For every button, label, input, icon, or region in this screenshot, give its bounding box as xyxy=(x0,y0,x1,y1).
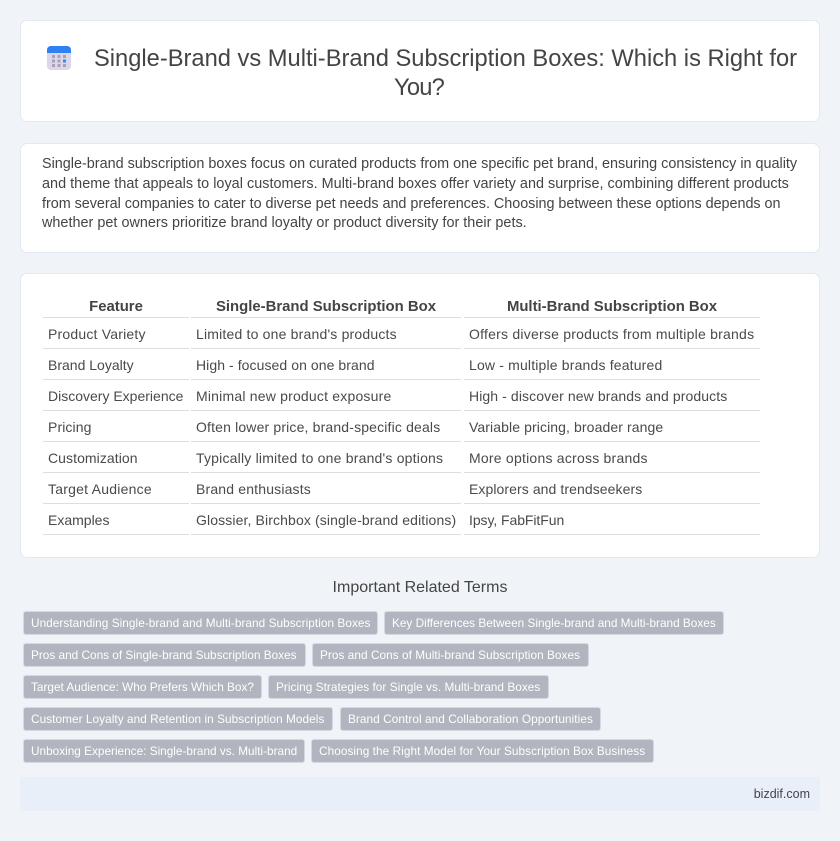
row: examples xyxy=(48,512,564,528)
row: discovery experience: Discovery Experience xyxy=(48,388,183,404)
panel: title card xyxy=(20,20,820,122)
tag xyxy=(23,675,262,699)
tag: Understanding Single-brand and Multi-brand Subscription Boxes xyxy=(31,616,370,630)
tag xyxy=(23,643,306,667)
heading: important related terms: Important Related Terms xyxy=(333,579,507,596)
tag: Pros and Cons of Single-brand Subscription Boxes xyxy=(31,648,297,662)
table header: Multi-Brand Subscription Box xyxy=(507,299,717,315)
tag: Target Audience: Who Prefers Which Box? xyxy=(31,680,254,694)
row: discovery experience: Minimal new product exposure xyxy=(196,388,391,404)
row: pricing xyxy=(48,419,663,435)
title line 1: Single-Brand vs Multi-Brand Subscription Boxes: Which is Right for xyxy=(94,46,797,72)
tag xyxy=(384,611,724,635)
tag xyxy=(268,675,549,699)
intro paragraph: from several companies to cater to diverse pet needs and preferences. Choosing between these options depends on xyxy=(42,196,780,212)
row: examples: Ipsy, FabFitFun xyxy=(469,512,564,528)
row: product variety xyxy=(48,326,754,342)
comparison table xyxy=(43,299,760,535)
intro paragraph: whether pet owners prioritize brand loyalty or product diversity for their pets. xyxy=(42,215,527,231)
table header: Single-Brand Subscription Box xyxy=(216,299,436,315)
panel: related term tags xyxy=(23,611,724,763)
row: product variety: Product Variety xyxy=(48,326,146,342)
row: examples: Examples xyxy=(48,512,109,528)
panel: intro text xyxy=(20,143,820,253)
table header xyxy=(89,299,717,315)
tag: Customer Loyalty and Retention in Subscription Models xyxy=(31,712,324,726)
tag: Choosing the Right Model for Your Subscription Box Business xyxy=(319,744,645,758)
row: customization: More options across brands xyxy=(469,450,648,466)
tag xyxy=(23,611,378,635)
tag xyxy=(340,707,601,731)
row: pricing: Often lower price, brand-specific deals xyxy=(196,419,440,435)
row: customization xyxy=(48,450,648,466)
tag: Pricing Strategies for Single vs. Multi-brand Boxes xyxy=(276,680,540,694)
row: target audience: Target Audience xyxy=(48,481,152,497)
footer source: bizdif.com xyxy=(754,787,810,801)
table header: Feature xyxy=(89,299,143,315)
tag xyxy=(23,739,305,763)
panel: comparison table xyxy=(20,273,820,558)
tag xyxy=(311,739,654,763)
row: customization: Typically limited to one brand's options xyxy=(196,450,443,466)
row: target audience xyxy=(48,481,642,497)
tag: Pros and Cons of Multi-brand Subscription Boxes xyxy=(320,648,580,662)
tag: Unboxing Experience: Single-brand vs. Multi-brand xyxy=(31,744,297,758)
row: product variety: Offers diverse products from multiple brands xyxy=(469,326,754,342)
intro paragraph xyxy=(42,156,797,231)
tag xyxy=(23,707,333,731)
tag: Brand Control and Collaboration Opportunities xyxy=(348,712,593,726)
title line 2: You? xyxy=(394,75,444,101)
row: product variety: Limited to one brand's products xyxy=(196,326,397,342)
row: target audience: Brand enthusiasts xyxy=(196,481,311,497)
row: brand loyalty: Low - multiple brands featured xyxy=(469,357,662,373)
row: examples: Glossier, Birchbox (single-brand editions) xyxy=(196,512,456,528)
icon: calendar xyxy=(47,46,71,70)
tag xyxy=(312,643,589,667)
row: customization: Customization xyxy=(48,450,138,466)
row: pricing: Pricing xyxy=(48,419,92,435)
row: pricing: Variable pricing, broader range xyxy=(469,419,663,435)
row: brand loyalty: Brand Loyalty xyxy=(48,357,134,373)
tag: Key Differences Between Single-brand and Multi-brand Boxes xyxy=(392,616,716,630)
footer bar xyxy=(20,777,820,811)
row: discovery experience: High - discover new brands and products xyxy=(469,388,727,404)
row: target audience: Explorers and trendseekers xyxy=(469,481,642,497)
row: brand loyalty: High - focused on one brand xyxy=(196,357,375,373)
intro paragraph: and theme that appeals to loyal customers. Multi-brand boxes offer variety and surprise, combining different products xyxy=(42,176,789,192)
intro paragraph: Single-brand subscription boxes focus on curated products from one specific pet brand, ensuring consistency in quality xyxy=(42,156,797,172)
row: brand loyalty xyxy=(48,357,662,373)
row: discovery experience xyxy=(48,388,727,404)
